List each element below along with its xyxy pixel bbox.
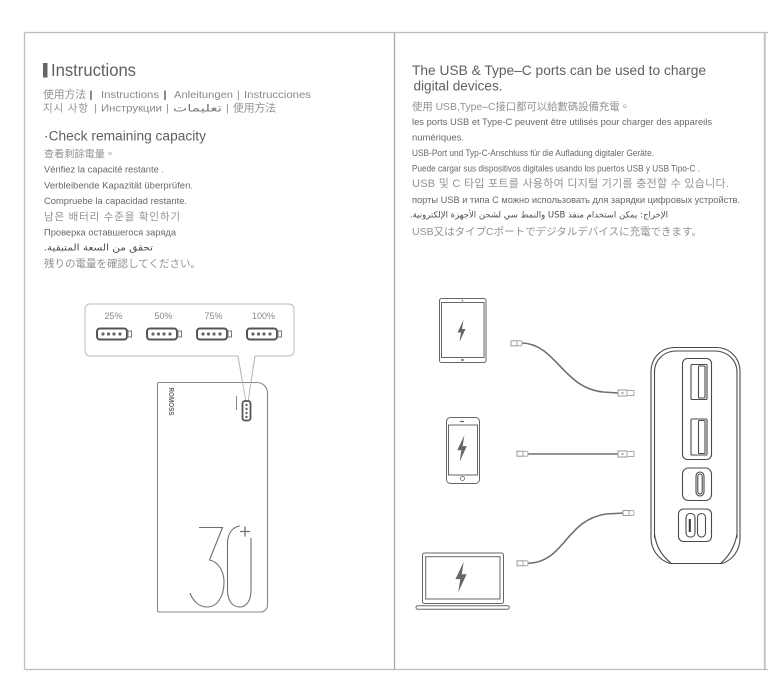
translation: French: les ports USB et Type-C peuvent être utilisés pour charger des appareils — [412, 117, 712, 127]
callout box with pointer — [85, 304, 294, 402]
subheading line two: تعليمات — [173, 103, 222, 115]
subheading line two — [43, 100, 276, 115]
subheading line two: | — [94, 102, 97, 114]
brand label ROMOSS: ROMOSS — [167, 388, 174, 416]
translation: Russian: порты USB и типа С можно использовать для зарядки цифровых устройств. — [412, 195, 740, 205]
translation: Russian: Проверка оставшегося заряда — [44, 228, 176, 238]
cable: laptop to Type-C port — [517, 510, 634, 566]
level label 50%: 50% — [154, 311, 173, 321]
level label 75%: 75% — [204, 311, 223, 321]
panel: right ports text — [410, 62, 740, 238]
translation: Traditional Chinese: 使用 USB,Type–C接口都可以給數碼設備充電。 — [412, 100, 630, 113]
translation: Arabic: تحقق من السعة المتبقية. — [44, 243, 153, 253]
icon: phone — [446, 418, 480, 484]
input port right — [698, 514, 706, 537]
subheading line one: 使用方法 — [43, 87, 86, 101]
micro and lightning port panel — [678, 509, 712, 542]
icon: battery 100% — [247, 328, 282, 340]
translation: German: Verbleibende Kapazität überprüfen. — [44, 180, 193, 190]
level label 100%: 100% — [252, 311, 275, 321]
inner shell line — [654, 351, 737, 563]
USB port two — [691, 419, 707, 455]
icon: battery 25% — [97, 328, 132, 340]
icon: battery 75% — [197, 328, 232, 340]
subheading line two: | — [226, 102, 229, 114]
illustration: power bank port end — [651, 348, 740, 564]
section heading: check remaining capacity: ·Check remaining capacity — [44, 128, 206, 144]
USB port panel — [682, 358, 712, 460]
pointer lines over indicator — [238, 356, 255, 402]
translation: Korean: 남은 배터리 수준을 확인하기 — [44, 210, 180, 223]
illustration: power bank front — [158, 356, 268, 612]
translation: Japanese: USB又はタイプCポートでデジタルデバイスに充電できます。 — [412, 225, 702, 238]
cable: tablet to USB port — [511, 341, 634, 396]
translation: German: USB-Port und Typ-C-Anschluss für die Aufladung digitaler Geräte. — [412, 148, 654, 158]
icon: battery 50% — [147, 328, 182, 340]
translation: Traditional Chinese: 查看剩餘電量。 — [44, 148, 115, 160]
subheading line two: 使用方法 — [233, 100, 276, 114]
translation: Arabic: الإخراج: يمكن استخدام منفذ USB والنمط سي لشحن الأجهزة الإلكترونية. — [410, 210, 668, 220]
subheading line two: 지시 사항 — [43, 102, 88, 114]
heading: USB and Type-C ports: The USB & Type–C ports can be used to charge — [412, 62, 706, 78]
subheading line one: | — [164, 89, 166, 101]
translation: Korean: USB 및 C 타입 포트를 사용하여 디지털 기기를 충전할 수 있습니다. — [412, 176, 729, 190]
callout: battery level indicators — [85, 304, 294, 402]
heading: Instructions: Instructions — [51, 60, 136, 80]
translation: French: Vérifiez la capacité restante . — [44, 164, 164, 174]
cable: phone to USB port — [517, 451, 634, 457]
panel: left instructions text — [43, 60, 311, 270]
heading second line: digital devices. — [414, 78, 502, 94]
subheading line one: | — [90, 89, 92, 101]
power bank body — [158, 382, 268, 612]
icon: tablet — [440, 298, 486, 362]
Type-C port — [696, 472, 704, 496]
capacity mark 30+ — [190, 526, 251, 607]
USB port one — [691, 364, 707, 400]
subheading line one: Instructions — [101, 89, 159, 101]
power button line — [236, 396, 238, 410]
translation: Spanish: Compruebe la capacidad restante. — [44, 196, 187, 206]
input port left — [686, 514, 695, 537]
subheading line one — [43, 87, 311, 101]
outer shell — [651, 348, 740, 564]
level label 25%: 25% — [104, 311, 123, 321]
icon: vertical battery indicator — [242, 401, 250, 420]
heading marker bar — [43, 63, 48, 78]
subheading line one: | — [237, 89, 240, 101]
subheading line one: Instrucciones — [244, 89, 311, 101]
translation: French continued: numériques. — [412, 132, 464, 142]
translation: Spanish: Puede cargar sus dispositivos digitales usando los puertos USB y USB Tipo-C . — [412, 164, 700, 174]
subheading line one: Anleitungen — [174, 89, 233, 101]
translation: Japanese: 残りの電量を確認してください。 — [44, 257, 201, 270]
subheading line two: | — [166, 102, 169, 114]
Type-C port panel — [682, 468, 712, 500]
subheading line two: Инструкции — [101, 102, 162, 114]
icon: laptop — [416, 553, 509, 609]
